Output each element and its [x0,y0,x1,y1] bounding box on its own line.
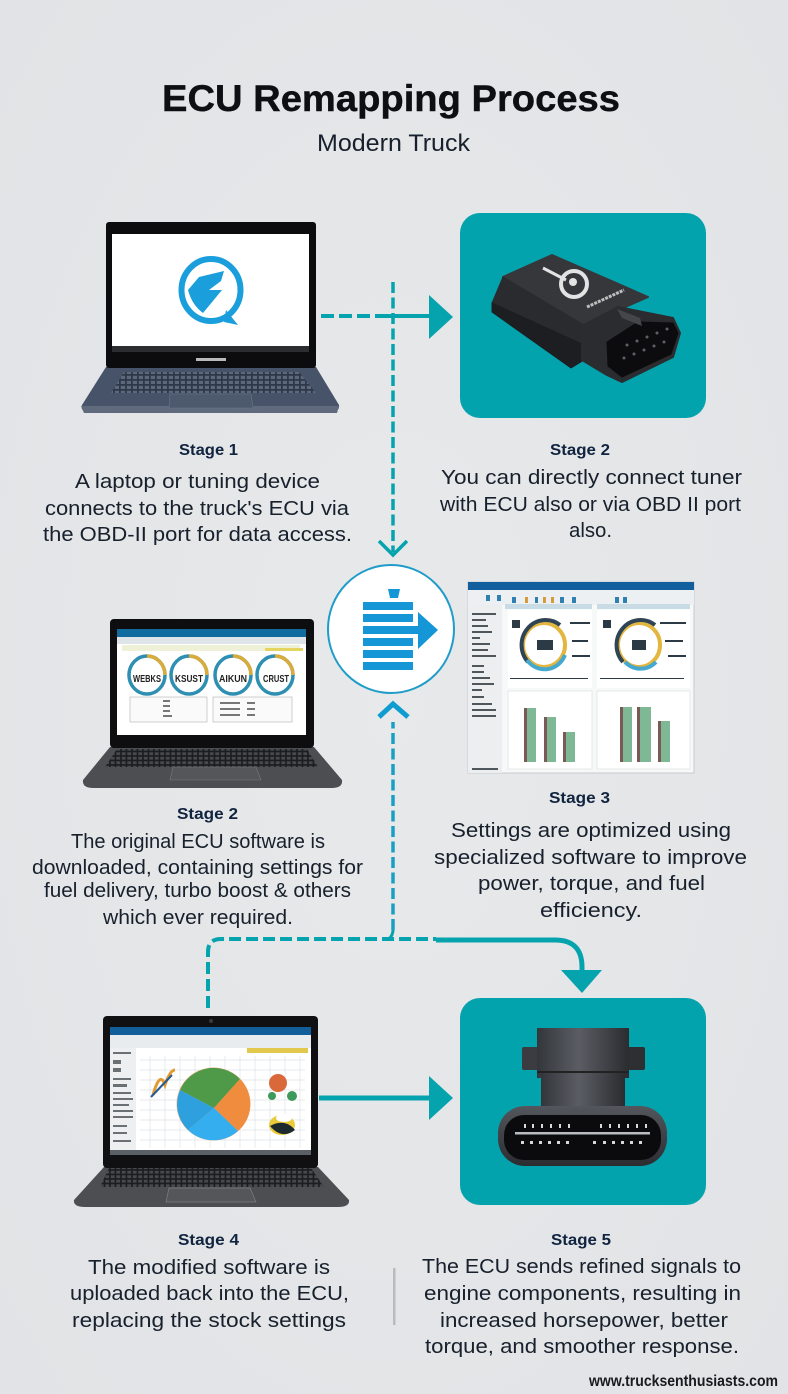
stage 2 text, left [32,806,363,929]
stage 1 text: A laptop or tuning device [75,471,320,493]
stage 2 text, right: You can directly connect tuner [441,467,742,489]
stage 3 text: power, torque, and fuel [478,873,705,895]
stage 5 text: increased horsepower, better [440,1310,728,1332]
stage 4 text: uploaded back into the ECU, [70,1283,349,1305]
icon: app logo [182,259,240,325]
stage 2 text, left: which ever required. [102,907,293,929]
laptop: stage 4 [74,1016,349,1207]
laptop: stage 2: CRUST [263,674,289,685]
laptop: stage 1 [81,222,339,413]
stage 2 text, left: fuel delivery, turbo boost & others [44,880,351,902]
stage 2 text, right: with ECU also or via OBD II port [439,494,741,516]
stage 3 text [434,790,747,922]
stage 5 text: engine components, resulting in [424,1283,741,1305]
stage 4 text: Stage 4 [178,1232,239,1249]
stage 1 text: connects to the truck's ECU via [45,498,350,520]
laptop: stage 2: WEBKS [133,674,161,685]
arrow: dashed down to circle [379,282,407,555]
stage 2 text, left: Stage 2 [177,806,238,823]
stage 3 text: Settings are optimized using [451,820,731,842]
stage 3 text: efficiency. [540,900,642,922]
arrow: laptop to tuner [321,295,453,339]
stage 2 text, right: also. [569,520,612,542]
stage 2 text, left: downloaded, containing settings for [32,857,363,879]
stage 2 text, right [439,442,742,542]
stage 5 text [422,1232,741,1358]
panel: OBD tuner device [460,213,706,418]
laptop: stage 2: AIKUN [219,674,247,685]
stage 1 text: the OBD-II port for data access. [43,524,352,546]
stage 5 text: torque, and smoother response. [425,1336,739,1358]
stage 3 text: Stage 3 [549,790,610,807]
stage 3 text: specialized software to improve [434,847,747,869]
subtitle: Modern Truck [317,130,471,157]
laptop: stage 2: KSUST [175,674,203,685]
icon: remap circle [328,565,454,693]
stage 4 text: The modified software is [88,1257,330,1279]
laptop: stage 2 [83,619,342,788]
stage 5 text: Stage 5 [551,1232,611,1249]
arrow: laptop 4 to ECU connector [319,1076,453,1120]
pie chart [176,1068,250,1140]
arrow: laptop 4 up and across to ECU connector [208,939,602,1008]
arrow: dashed up to circle [379,704,408,939]
panel: ECU connector [460,998,706,1205]
stage 2 text, right: Stage 2 [550,442,610,459]
title: ECU Remapping Process [162,78,620,119]
stage 1 text: Stage 1 [179,442,238,459]
stage 1 text [43,442,352,546]
stage 2 text, left: The original ECU software is [71,831,325,853]
stage 4 text: replacing the stock settings [72,1310,346,1332]
stage 4 text [70,1232,349,1332]
stage 5 text: The ECU sends refined signals to [422,1256,741,1278]
software screenshot [468,582,694,773]
